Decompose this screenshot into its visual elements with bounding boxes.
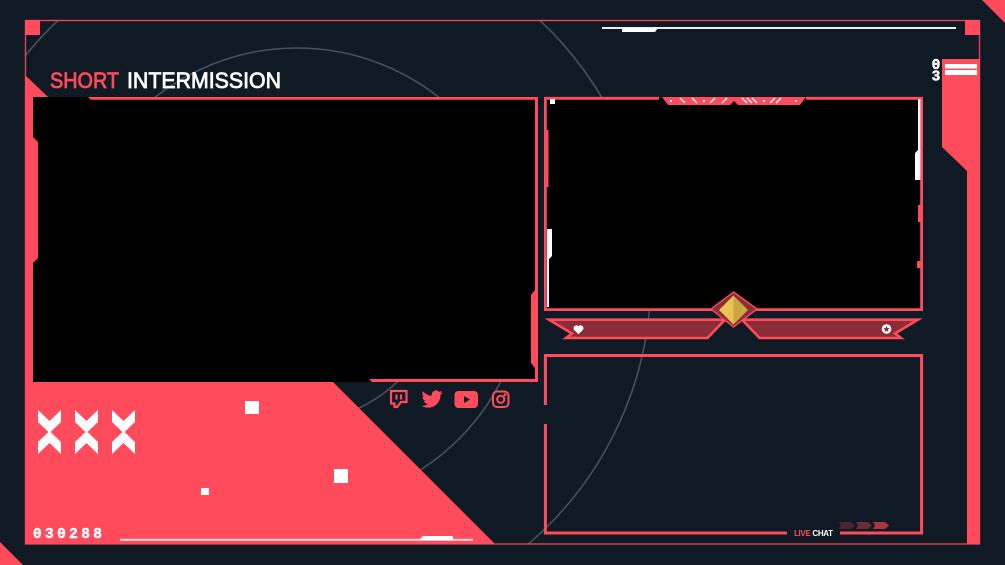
icon: star badge [882, 324, 891, 334]
title: INTERMISSION [127, 68, 281, 93]
title: SHORT [50, 68, 119, 93]
top right progress line [602, 27, 956, 32]
background circles [25, 20, 651, 544]
social icon: twitter [422, 390, 443, 408]
social icon: twitch [391, 391, 406, 407]
main video panel [25, 97, 538, 382]
camera panel [545, 97, 922, 310]
icon: heart [574, 325, 583, 334]
page number 03: 0 [932, 58, 940, 74]
right bar white stripes [945, 64, 977, 75]
gold diamond emblem [711, 292, 757, 327]
title [50, 68, 281, 93]
corner square top right [965, 20, 980, 35]
left accent strip [25, 75, 48, 382]
code number: 030288 [33, 527, 102, 543]
page number 03: 3 [932, 70, 940, 86]
camera panel left accents [545, 99, 555, 307]
chat panel [545, 356, 922, 533]
live chat label: LIVE CHAT [794, 529, 833, 538]
corner triangle top right [982, 0, 1005, 23]
corner triangle bottom left [0, 542, 23, 565]
bottom left red panel [25, 382, 495, 544]
bottom progress line [120, 536, 473, 541]
corner square top left [25, 20, 40, 35]
bottom left chevron icons [38, 410, 135, 454]
social icon: youtube [454, 391, 478, 408]
chat chevrons [839, 522, 889, 529]
decorative white squares [201, 401, 348, 495]
left ribbon [549, 320, 725, 338]
page number 03 [932, 58, 940, 86]
right side bar [942, 59, 980, 544]
social icon: instagram [493, 392, 508, 407]
camera panel right accents [915, 99, 922, 268]
camera panel top tab [662, 97, 806, 105]
right ribbon [742, 320, 918, 338]
